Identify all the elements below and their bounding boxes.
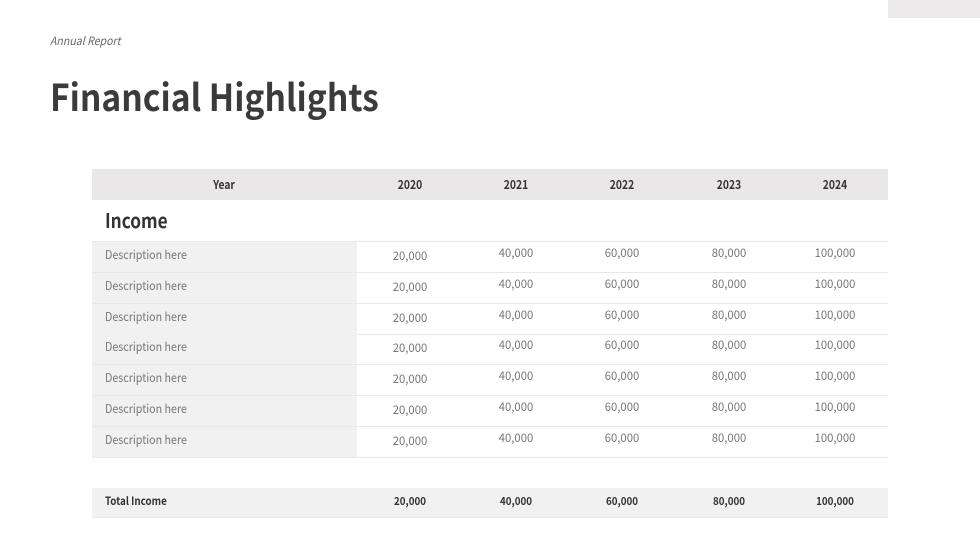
row 1: 20,000: [393, 247, 427, 264]
row 1: [92, 242, 888, 273]
row 3: 20,000: [393, 309, 427, 326]
row 3: 80,000: [712, 306, 746, 323]
subtitle: Annual Report: [50, 33, 121, 49]
row 2: [92, 273, 888, 304]
row 3: 40,000: [499, 306, 533, 323]
row 3: 60,000: [605, 306, 639, 323]
total income row: 20,000: [394, 493, 426, 509]
row 4: 100,000: [815, 336, 855, 353]
row 6: 80,000: [712, 398, 746, 415]
total income row: [92, 488, 888, 518]
header row: 2024: [823, 176, 847, 193]
section heading: income: Income: [105, 205, 168, 234]
row 5: 100,000: [815, 367, 855, 384]
row 1: 80,000: [712, 244, 746, 261]
row 1: 40,000: [499, 244, 533, 261]
row 6: [92, 396, 888, 427]
title: Financial Highlights: [50, 68, 378, 122]
row 7: [92, 427, 888, 458]
header row: [92, 169, 888, 200]
row 4: 80,000: [712, 336, 746, 353]
row 6: Description here: [105, 400, 187, 417]
row 5: 40,000: [499, 367, 533, 384]
total income row: 80,000: [713, 493, 745, 509]
income rows: [92, 241, 888, 459]
row 2: 100,000: [815, 275, 855, 292]
row 3: 100,000: [815, 306, 855, 323]
row 2: 80,000: [712, 275, 746, 292]
row 6: 40,000: [499, 398, 533, 415]
header row: 2023: [717, 176, 741, 193]
row 5: Description here: [105, 369, 187, 386]
row 1: 60,000: [605, 244, 639, 261]
row 2: 60,000: [605, 275, 639, 292]
row 7: 100,000: [815, 429, 855, 446]
total income row: Total Income: [105, 493, 167, 509]
row 6: 60,000: [605, 398, 639, 415]
row 5: 20,000: [393, 370, 427, 387]
row 7: 20,000: [393, 432, 427, 449]
total income row: 40,000: [500, 493, 532, 509]
row 4: 40,000: [499, 336, 533, 353]
row 2: Description here: [105, 277, 187, 294]
row 7: 80,000: [712, 429, 746, 446]
row 6: 100,000: [815, 398, 855, 415]
row 2: 40,000: [499, 275, 533, 292]
header row: 2022: [610, 176, 634, 193]
row 1: Description here: [105, 246, 187, 263]
row 4: [92, 334, 888, 365]
row 2: 20,000: [393, 278, 427, 295]
row 4: 60,000: [605, 336, 639, 353]
row 6: 20,000: [393, 401, 427, 418]
header row: 2021: [504, 176, 528, 193]
row 4: Description here: [105, 338, 187, 355]
row 5: 80,000: [712, 367, 746, 384]
row 7: 40,000: [499, 429, 533, 446]
header row: 2020: [398, 176, 422, 193]
table: [92, 169, 888, 518]
row 5: [92, 365, 888, 396]
row 1: 100,000: [815, 244, 855, 261]
row 5: 60,000: [605, 367, 639, 384]
header row: Year: [213, 176, 235, 193]
row 7: Description here: [105, 431, 187, 448]
total income row: 100,000: [816, 493, 854, 509]
corner tab: [888, 0, 980, 18]
row 4: 20,000: [393, 339, 427, 356]
row 3: [92, 304, 888, 335]
row 3: Description here: [105, 308, 187, 325]
row 7: 60,000: [605, 429, 639, 446]
total income row: 60,000: [606, 493, 638, 509]
